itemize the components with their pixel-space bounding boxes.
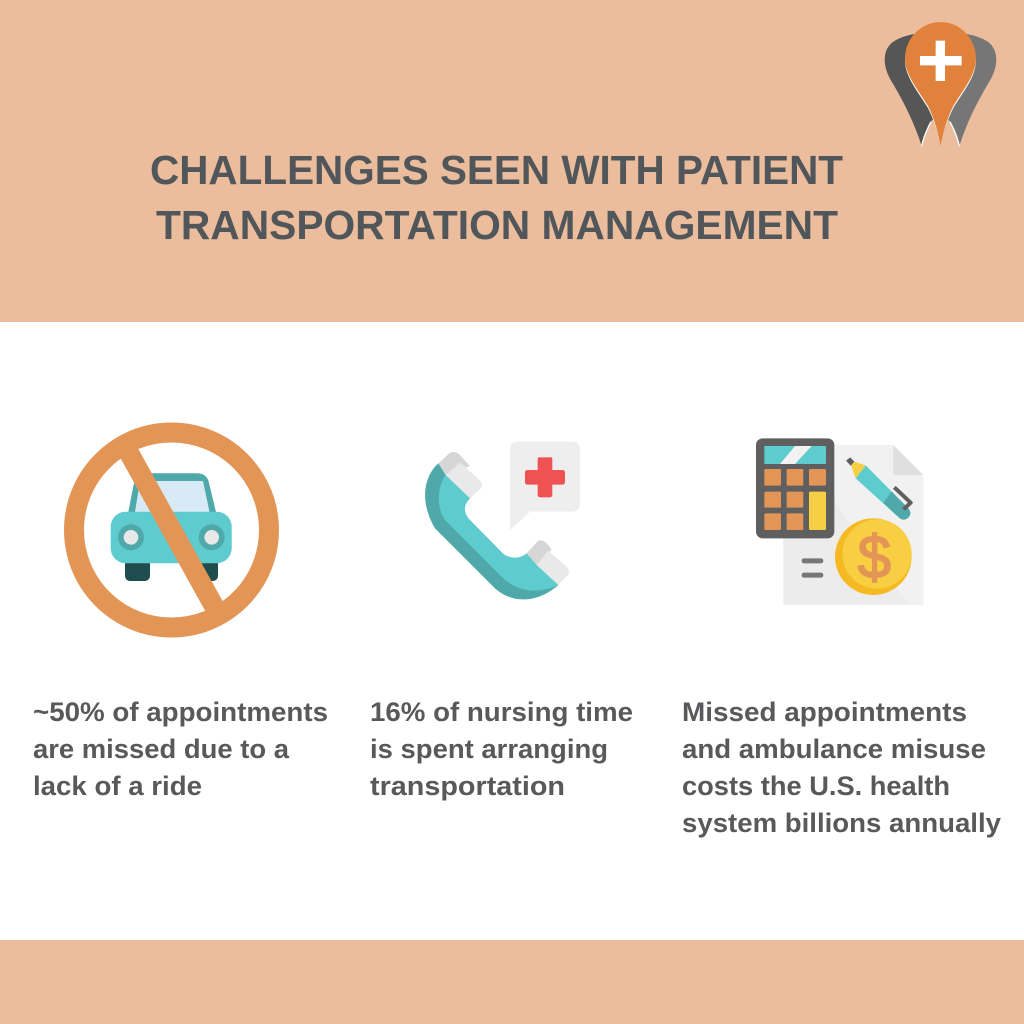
text: missed appointments statistic: are missed due to a: [33, 734, 289, 764]
icon: telephone with medical speech bubble: [425, 442, 580, 599]
text: missed appointments statistic: ~50% of appointments: [33, 697, 328, 727]
text: cost statement: and ambulance misuse: [682, 734, 986, 764]
text: cost statement: system billions annually: [682, 808, 1001, 838]
header band: [0, 0, 1024, 322]
text: cost statement: costs the U.S. health: [682, 771, 950, 801]
text: missed appointments statistic: lack of a ride: [33, 771, 202, 801]
text: nursing time statistic: 16% of nursing time: [370, 697, 633, 727]
text: cost statement: [682, 697, 1001, 838]
text: nursing time statistic: transportation: [370, 771, 565, 801]
logo: map pins with cross: [885, 22, 996, 146]
title: [150, 147, 843, 248]
icon: calculator, pen, bill and coin: $: [858, 523, 891, 590]
title: CHALLENGES SEEN WITH PATIENT: [150, 147, 843, 193]
text: nursing time statistic: is spent arranging: [370, 734, 608, 764]
text: missed appointments statistic: [33, 697, 328, 801]
text: cost statement: Missed appointments: [682, 697, 967, 727]
title: TRANSPORTATION MANAGEMENT: [156, 202, 838, 248]
footer band: [0, 940, 1024, 1024]
icon: calculator, pen, bill and coin: [756, 438, 923, 605]
icon: crossed-out car: [74, 432, 269, 628]
text: nursing time statistic: [370, 697, 633, 801]
